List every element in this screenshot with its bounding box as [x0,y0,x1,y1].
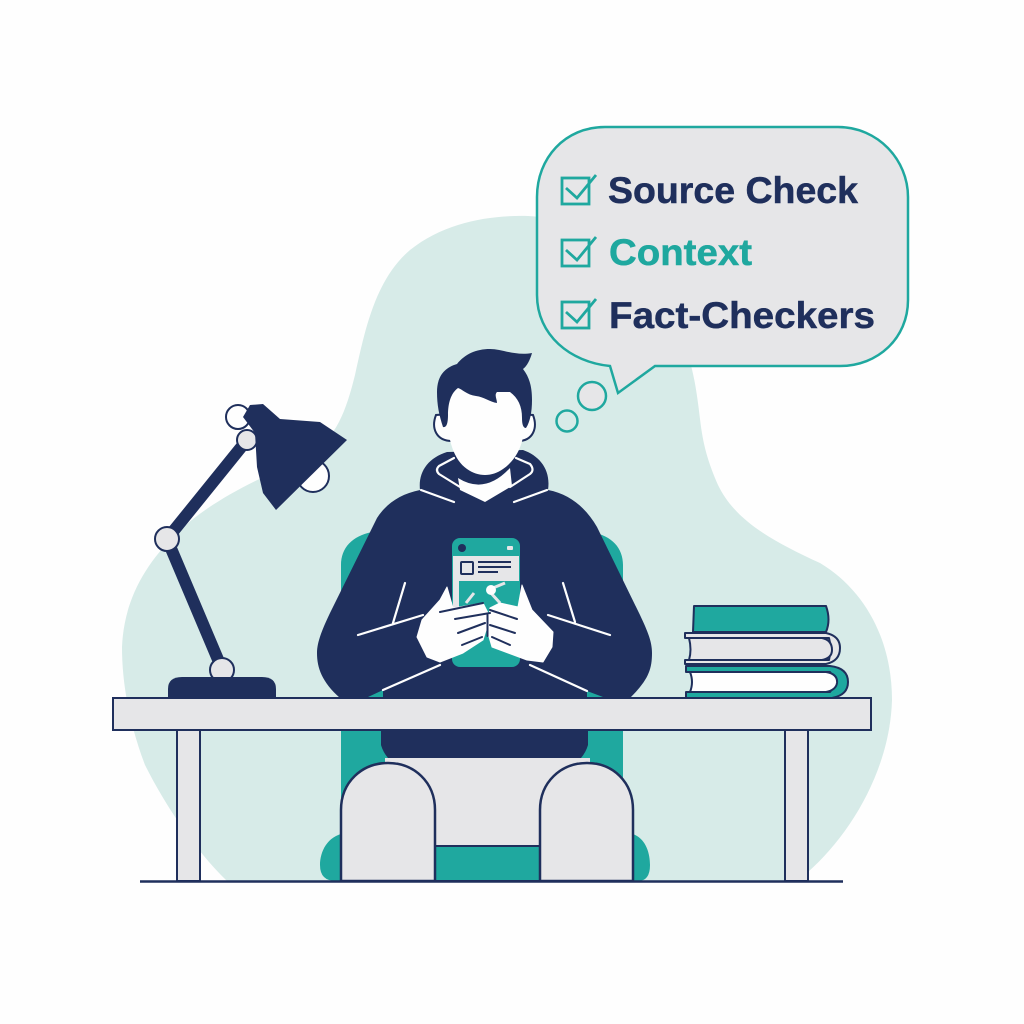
teal seat back glimpses by the elbows [368,690,603,697]
floor line [140,880,843,883]
face [447,382,524,475]
thought bubble [537,127,908,432]
background blob [122,216,892,881]
top book [693,606,828,632]
ear left [434,414,452,441]
thought circles [578,382,606,410]
label: Fact-Checkers: Fact-Checkers [609,295,875,336]
lamp [155,404,347,698]
lamp bulb [297,460,329,492]
lamp shade [243,404,347,510]
legs [341,763,633,881]
books [685,606,848,698]
checkbox 3 [562,299,596,328]
hands [417,585,553,662]
desk [113,698,871,881]
checkbox 1 [562,175,596,204]
bottom book [686,666,848,698]
chair [320,532,650,881]
hood and sleeve lines [358,458,610,691]
checkbox 2 [562,237,596,266]
label: Source Check: Source Check [608,170,858,211]
person [317,349,652,758]
shirt collar [458,468,512,502]
lamp hinge [226,405,250,429]
bubble body [537,127,908,393]
middle book [685,633,840,664]
hair [437,349,532,428]
ear right [518,414,535,441]
label: Context: Context [609,232,752,273]
phone [452,538,520,667]
lamp base [168,677,276,698]
lamp arms [167,440,247,669]
hoodie body [317,450,652,698]
hoodie lower torso [381,728,588,758]
